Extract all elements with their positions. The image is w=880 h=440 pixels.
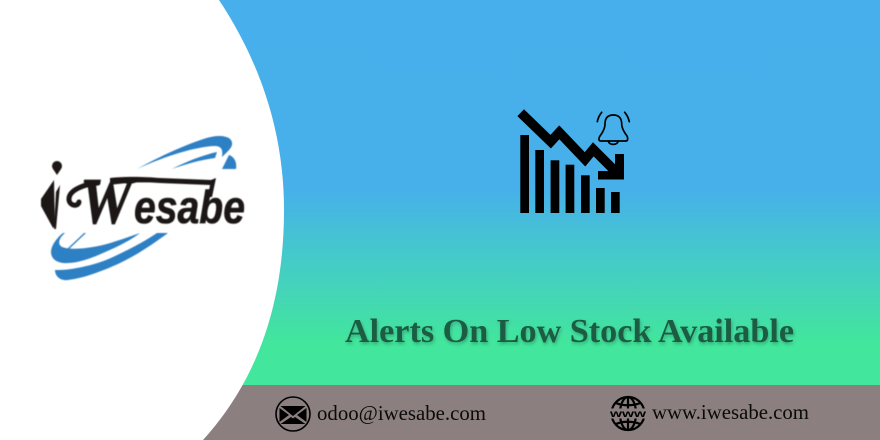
logo bottom swoosh [51, 233, 168, 280]
icon: falling stock chart with bell [520, 112, 629, 213]
website text: www.iwesabe.com [652, 400, 809, 424]
icon: globe www [608, 397, 647, 430]
logo wordmark W: W [80, 165, 136, 238]
falling arrow [521, 113, 618, 174]
logo [41, 136, 245, 280]
logo i figure [41, 161, 62, 229]
logo bar [110, 177, 216, 197]
white curved panel [0, 0, 284, 440]
arrow head [598, 154, 624, 180]
footer bar [190, 385, 880, 440]
logo top swoosh [137, 136, 236, 169]
logo wordmark rest: esabe [134, 181, 245, 233]
icon: envelope [276, 397, 310, 431]
bell [597, 112, 629, 144]
email text: odoo@iwesabe.com [317, 401, 486, 425]
bars [520, 135, 620, 213]
icon: globe www: www [608, 409, 646, 420]
logo W hook [69, 183, 98, 205]
title: Alerts On Low Stock Available [345, 313, 794, 350]
